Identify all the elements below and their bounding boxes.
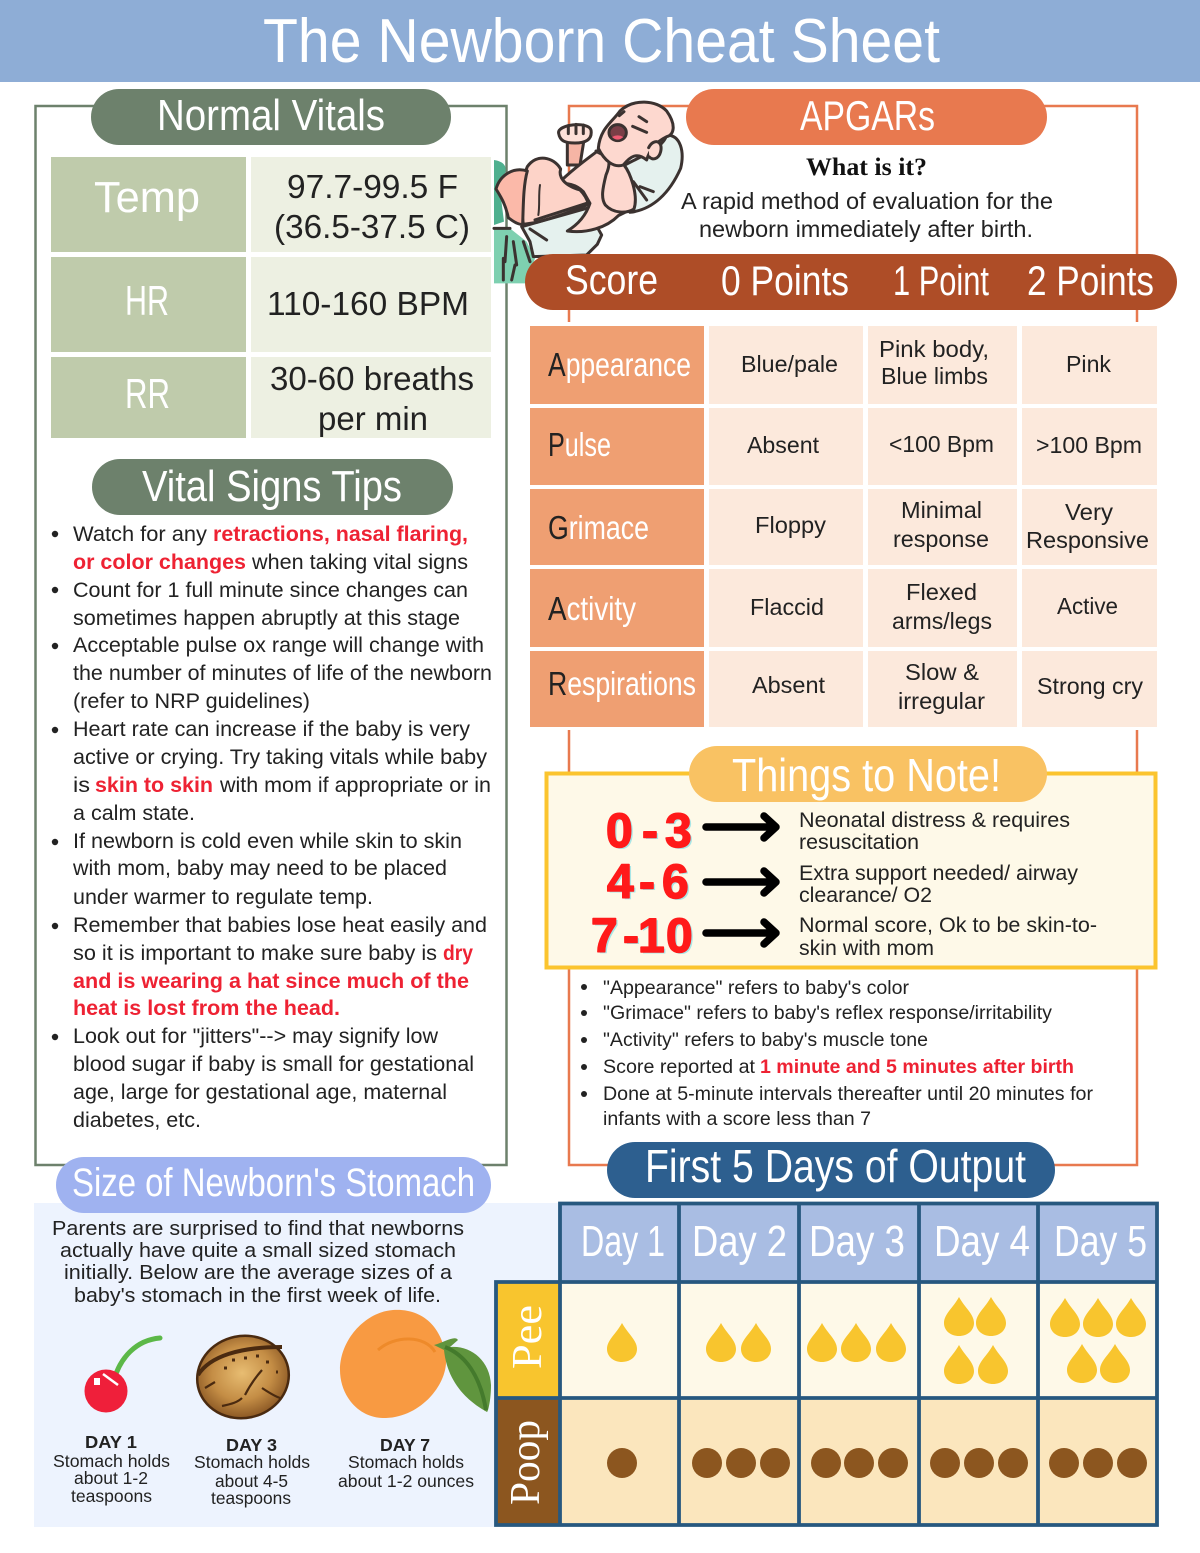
caption: day 1: DAY 1 (85, 1432, 137, 1452)
text block: vital signs tips list: sometimes happen abruptly at this stage (73, 607, 460, 630)
row labels: Activity (548, 590, 636, 627)
column headers (581, 1217, 1147, 1266)
text block: vital signs tips list: and is wearing a hat since much of the (73, 970, 469, 993)
heading: APGARs (686, 89, 1047, 145)
heading: output: First 5 Days of Output (645, 1140, 1026, 1192)
text block: vital signs tips list: when taking vital signs (251, 551, 468, 574)
caption: day 7: DAY 7 (380, 1435, 430, 1455)
table cell values: Absent (747, 432, 820, 458)
text block: notes list (581, 977, 1094, 1130)
text block: stomach intro (52, 1217, 464, 1307)
title banner (0, 0, 1200, 82)
text block: what is it: A rapid method of evaluation for the (681, 188, 1053, 214)
table: vitals: 110-160 BPM (267, 285, 469, 322)
table: vitals: Temp (94, 173, 200, 222)
column headers: Day 4 (934, 1217, 1030, 1266)
table: vitals: 30-60 breaths (270, 360, 474, 397)
table background: APGAR scores (526, 322, 1161, 730)
panel: APGARs (526, 89, 1161, 1165)
table cell values: Pink body, (879, 336, 989, 362)
text block: vital signs tips list: blood sugar if baby is small for gestational (73, 1053, 474, 1076)
score ranges (591, 805, 695, 964)
table cell values: Floppy (755, 512, 827, 538)
text block: vital signs tips list: Remember that babies lose heat easily and (73, 914, 487, 937)
row labels: Grimace (548, 509, 649, 546)
column headers: Day 5 (1054, 1217, 1147, 1266)
score ranges: 0-3 (608, 806, 694, 860)
heading: Normal Vitals: Normal Vitals (157, 91, 385, 140)
arrow: 7-10 (706, 922, 776, 944)
caption: day 1: about 1-2 (74, 1468, 148, 1488)
panel: normal vitals and tips (36, 89, 506, 1165)
text block: notes list: infants with a score less than 7 (603, 1108, 871, 1130)
score meanings: Extra support needed/ airway (799, 862, 1079, 885)
score ranges: 7-10 (591, 910, 693, 963)
text block: vital signs tips list: active or crying. Try taking vitals while baby (73, 746, 488, 769)
score meanings: Normal score, Ok to be skin-to- (799, 914, 1097, 937)
table: vitals: HR (125, 277, 169, 324)
text block: vital signs tips list: Acceptable pulse ox range will change with (73, 634, 484, 657)
table cell values: response (893, 526, 989, 552)
text block: vital signs tips list: (refer to NRP guidelines) (73, 690, 310, 713)
table: vitals: RR (125, 370, 170, 417)
icons: poop dots (607, 1448, 1147, 1478)
table cell values: Strong cry (1037, 673, 1143, 699)
row labels: Appearance (548, 346, 691, 383)
text block: vital signs tips list: Count for 1 full minute since changes can (73, 579, 468, 602)
text block: vital signs tips list: the number of minutes of life of the newborn (73, 662, 492, 685)
table cell values: Active (1057, 593, 1118, 619)
table: vitals: 97.7-99.5 F (287, 168, 458, 205)
caption: day 1: teaspoons (71, 1486, 152, 1506)
heading: Things to Note: Things to Note! (732, 749, 1001, 801)
heading: stomach size (56, 1157, 491, 1213)
score meanings: resuscitation (799, 831, 919, 854)
heading: score columns: 2 Points (1027, 257, 1154, 304)
text block: what is it: What is it? (806, 154, 927, 181)
panel: size of newborn's stomach (34, 1157, 564, 1527)
text block: vital signs tips list: Watch for any (73, 523, 208, 546)
text block: vital signs tips list: If newborn is cold even while skin to skin (73, 830, 462, 853)
caption: day 3: Stomach holds (194, 1452, 310, 1472)
caption: day 7 (338, 1435, 474, 1491)
arrow: 4-6 (706, 871, 776, 893)
text block: vital signs tips list: with mom if appropriate or in (219, 774, 491, 797)
score meanings: skin with mom (799, 937, 934, 960)
text block: notes list: Score reported at (603, 1056, 756, 1078)
text block: what is it: newborn immediately after birth. (699, 216, 1033, 242)
heading: score columns (525, 254, 1177, 310)
text block: vital signs tips list: is (73, 774, 90, 797)
score ranges: 4-6 (607, 856, 689, 909)
table cell values: Pink (1066, 351, 1111, 377)
table cell values: Very (1065, 499, 1114, 525)
text block: vital signs tips list: retractions, nasal flaring, (213, 523, 468, 546)
icon: cherry (84, 1338, 160, 1412)
caption: day 7: Stomach holds (348, 1452, 464, 1472)
text block: vital signs tips list (52, 523, 492, 1132)
table cell values: Flexed (906, 579, 977, 605)
icon: newborn baby held in hands (494, 102, 682, 283)
row labels: Pulse (548, 426, 611, 463)
text block: vital signs tips list: with mom, baby may need to be placed (72, 857, 447, 880)
text block: vital signs tips list: so it is important to make sure baby is (73, 942, 437, 965)
text block: vital signs tips list: heat is lost from the head. (73, 997, 340, 1020)
text block: notes list: "Grimace" refers to baby's reflex response/irritability (603, 1002, 1052, 1024)
table cell values: arms/legs (892, 608, 992, 634)
text block: vital signs tips list: or color changes (73, 551, 246, 574)
panel: first 5 days of output (496, 1140, 1157, 1525)
table cell values: Absent (752, 672, 826, 698)
title banner: The Newborn Cheat Sheet (263, 7, 940, 76)
heading: Vital Signs Tips: Vital Signs Tips (142, 462, 402, 511)
row label: Pee: Pee (505, 1305, 551, 1369)
heading: APGARs: APGARs (800, 92, 935, 139)
table cell values: Responsive (1026, 527, 1149, 553)
caption: day 1 (53, 1432, 170, 1506)
panel: things to note (546, 746, 1156, 968)
table cell values: >100 Bpm (1036, 432, 1142, 458)
caption: day 1: Stomach holds (53, 1451, 170, 1471)
row labels: Respirations (548, 665, 696, 702)
score ranges: 7-10 (593, 912, 695, 964)
table cell values: <100 Bpm (889, 431, 994, 457)
text block: vital signs tips list: Heart rate can increase if the baby is very (73, 718, 471, 741)
column headers: Day 3 (809, 1217, 905, 1266)
table cell values: Blue/pale (741, 351, 838, 377)
text block: stomach intro: Parents are surprised to find that newborns (52, 1217, 464, 1240)
score ranges: 0-3 (606, 805, 692, 858)
caption: day 3: DAY 3 (226, 1435, 277, 1455)
arrow: 0-3 (706, 816, 776, 838)
table cell values: irregular (898, 688, 985, 714)
row label: Poop: Poop (503, 1420, 549, 1505)
table: vitals: per min (318, 400, 428, 437)
table: vitals (51, 157, 491, 438)
caption: day 3: about 4-5 (215, 1471, 288, 1491)
text block: vital signs tips list: diabetes, etc. (73, 1109, 201, 1132)
text block: vital signs tips list: Look out for "jitters"--> may signify low (73, 1025, 439, 1048)
heading: Normal Vitals (91, 89, 451, 145)
icons: pee drops (607, 1297, 1146, 1384)
text block: notes list: "Appearance" refers to baby's color (603, 977, 910, 999)
icon: walnut (189, 1327, 297, 1427)
score meanings: clearance/ O2 (799, 884, 932, 907)
table cell values: Minimal (901, 497, 982, 523)
text block: vital signs tips list: skin to skin (95, 774, 213, 797)
table: vitals: (36.5-37.5 C) (274, 208, 470, 245)
score ranges: 4-6 (609, 858, 691, 910)
table cell values: Flaccid (750, 594, 824, 620)
table cell values: Slow & (905, 659, 979, 685)
table cell values (741, 336, 1149, 714)
text block: notes list: 1 minute and 5 minutes after birth (760, 1056, 1074, 1078)
column headers: Day 2 (692, 1217, 787, 1266)
text block: vital signs tips list: dry (443, 942, 473, 965)
chart grid (496, 1203, 1157, 1525)
heading: stomach size: Size of Newborn's Stomach (72, 1161, 475, 1205)
table cell values: Blue limbs (881, 363, 988, 389)
text block: notes list: "Activity" refers to baby's muscle tone (603, 1029, 928, 1051)
heading: score columns: 0 Points (721, 257, 849, 304)
text block: stomach intro: baby's stomach in the first week of life. (74, 1284, 441, 1307)
icon: apricot with leaf (340, 1310, 491, 1418)
row labels (548, 346, 696, 702)
text block: vital signs tips list: age, large for gestational age, maternal (73, 1081, 447, 1104)
score meanings: Neonatal distress & requires (799, 809, 1070, 832)
text block: stomach intro: initially. Below are the average sizes of a (64, 1261, 453, 1284)
text block: vital signs tips list: a calm state. (73, 802, 195, 825)
caption: day 7: about 1-2 ounces (338, 1471, 474, 1491)
column headers: Day 1 (581, 1217, 665, 1266)
text block: what is it (681, 154, 1053, 242)
text block: stomach intro: actually have quite a small sized stomach (60, 1239, 456, 1262)
caption: day 3: teaspoons (211, 1488, 291, 1508)
text block: vital signs tips list: under warmer to regulate temp. (73, 886, 373, 909)
heading: score columns: 1 Point (893, 257, 989, 304)
text block: notes list: Done at 5-minute intervals thereafter until 20 minutes for (603, 1083, 1094, 1105)
caption: day 3 (194, 1435, 310, 1508)
heading: score columns: Score (565, 256, 658, 303)
score meanings (799, 809, 1097, 960)
